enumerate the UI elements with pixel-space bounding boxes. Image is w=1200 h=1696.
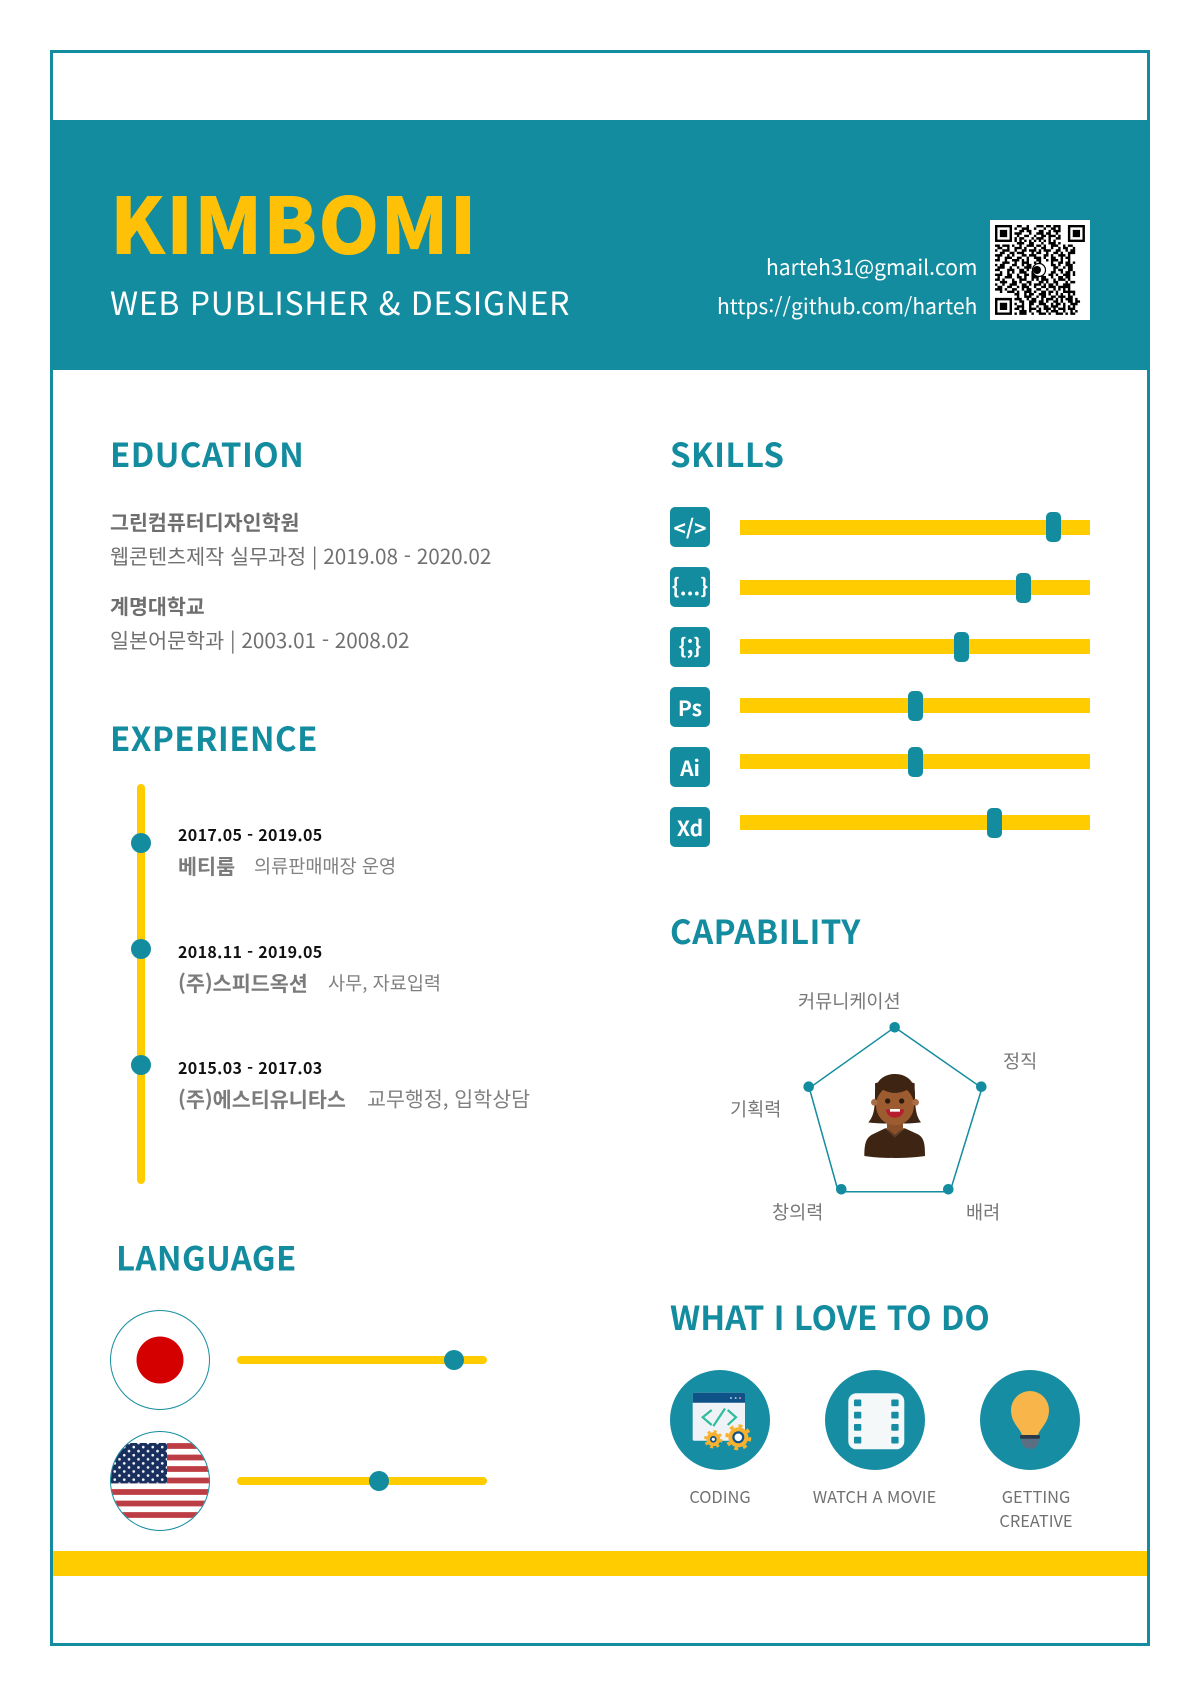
radar labels: 배려: [966, 1198, 1000, 1225]
school 1: [110, 506, 491, 570]
job 1: 의류판매매장 운영: [254, 852, 396, 879]
github link: https://github.com/harteh: [717, 291, 978, 321]
radar pentagon chart: [803, 1022, 987, 1195]
panel: language: [100, 1232, 487, 1530]
panel: skills: [670, 429, 1090, 847]
label: getting creative: CREATIVE: [999, 1508, 1073, 1532]
school 2: 계명대학교: [110, 590, 205, 620]
skill: css: [670, 567, 1090, 607]
skill: photoshop: [670, 687, 1090, 727]
skill: javascript: [670, 627, 1090, 667]
panel: capability: [670, 906, 1037, 1225]
skill: javascript: {;}: [679, 632, 701, 662]
skill: css: {...}: [672, 572, 708, 602]
school 1: 웹콘텐츠제작 실무과정 | 2019.08 - 2020.02: [110, 540, 491, 570]
job 3: [178, 1055, 530, 1113]
skill: illustrator: Ai: [679, 753, 700, 783]
icon: coding: [670, 1370, 770, 1470]
skill: html: [670, 507, 1090, 547]
panel: what i love to do: [670, 1292, 1080, 1532]
job 3: (주)에스티유니타스: [178, 1083, 346, 1113]
radar labels: 정직: [1003, 1047, 1037, 1074]
skill: xd: Xd: [677, 813, 703, 843]
heading: education: EDUCATION: [110, 429, 304, 477]
school 2: 일본어문학과 | 2003.01 - 2008.02: [110, 624, 409, 654]
icon: light bulb: [980, 1370, 1080, 1470]
icon: movie film: [825, 1370, 925, 1470]
label: coding: CODING: [689, 1484, 751, 1508]
icon: usa flag: [110, 1431, 210, 1531]
radar labels: 창의력: [772, 1198, 823, 1225]
job 1: [178, 822, 396, 880]
school 1: 그린컴퓨터디자인학원: [110, 506, 299, 536]
english level slider: [237, 1471, 487, 1491]
QR code: [990, 220, 1090, 320]
skill: photoshop: Ps: [678, 693, 702, 723]
panel: experience: [110, 713, 530, 1184]
radar labels: [730, 987, 1037, 1225]
skill: illustrator: [670, 747, 1090, 787]
job 1: 베티룸: [178, 850, 235, 880]
japanese level slider: [237, 1350, 487, 1370]
heading: experience: EXPERIENCE: [110, 713, 318, 761]
radar labels: 기획력: [730, 1095, 781, 1122]
panel: education: [110, 429, 491, 654]
job 2: 2018.11 - 2019.05: [178, 939, 323, 963]
skill: html: </>: [674, 513, 706, 543]
job 2: 사무, 자료입력: [328, 969, 441, 996]
job subtitle: WEB PUBLISHER & DESIGNER: [110, 279, 570, 325]
timeline: [131, 784, 151, 1184]
label: getting creative: [999, 1484, 1073, 1532]
heading: what i love to do: WHAT I LOVE TO DO: [670, 1292, 990, 1340]
footer yellow band: [53, 1551, 1147, 1576]
label: watch a movie: WATCH A MOVIE: [813, 1484, 936, 1508]
job 2: (주)스피드옥션: [178, 967, 308, 997]
job 2: [178, 939, 441, 997]
radar labels: 커뮤니케이션: [798, 987, 901, 1014]
job 3: 교무행정, 입학상담: [367, 1082, 530, 1112]
email: harteh31@gmail.com: [766, 252, 978, 282]
label: getting creative: GETTING: [1002, 1484, 1070, 1508]
job 3: 2015.03 - 2017.03: [178, 1055, 323, 1079]
job 1: 2017.05 - 2019.05: [178, 822, 323, 846]
header band: [50, 120, 1150, 370]
icon: avatar: [864, 1074, 925, 1158]
name title: KIMBOMI: [110, 165, 477, 277]
school 2: [110, 590, 409, 654]
heading: skills: SKILLS: [670, 429, 784, 477]
heading: capability: CAPABILITY: [670, 906, 861, 954]
heading: language: LANGUAGE: [116, 1232, 297, 1280]
icon: japan flag: [110, 1310, 210, 1410]
skill: xd: [670, 807, 1090, 847]
